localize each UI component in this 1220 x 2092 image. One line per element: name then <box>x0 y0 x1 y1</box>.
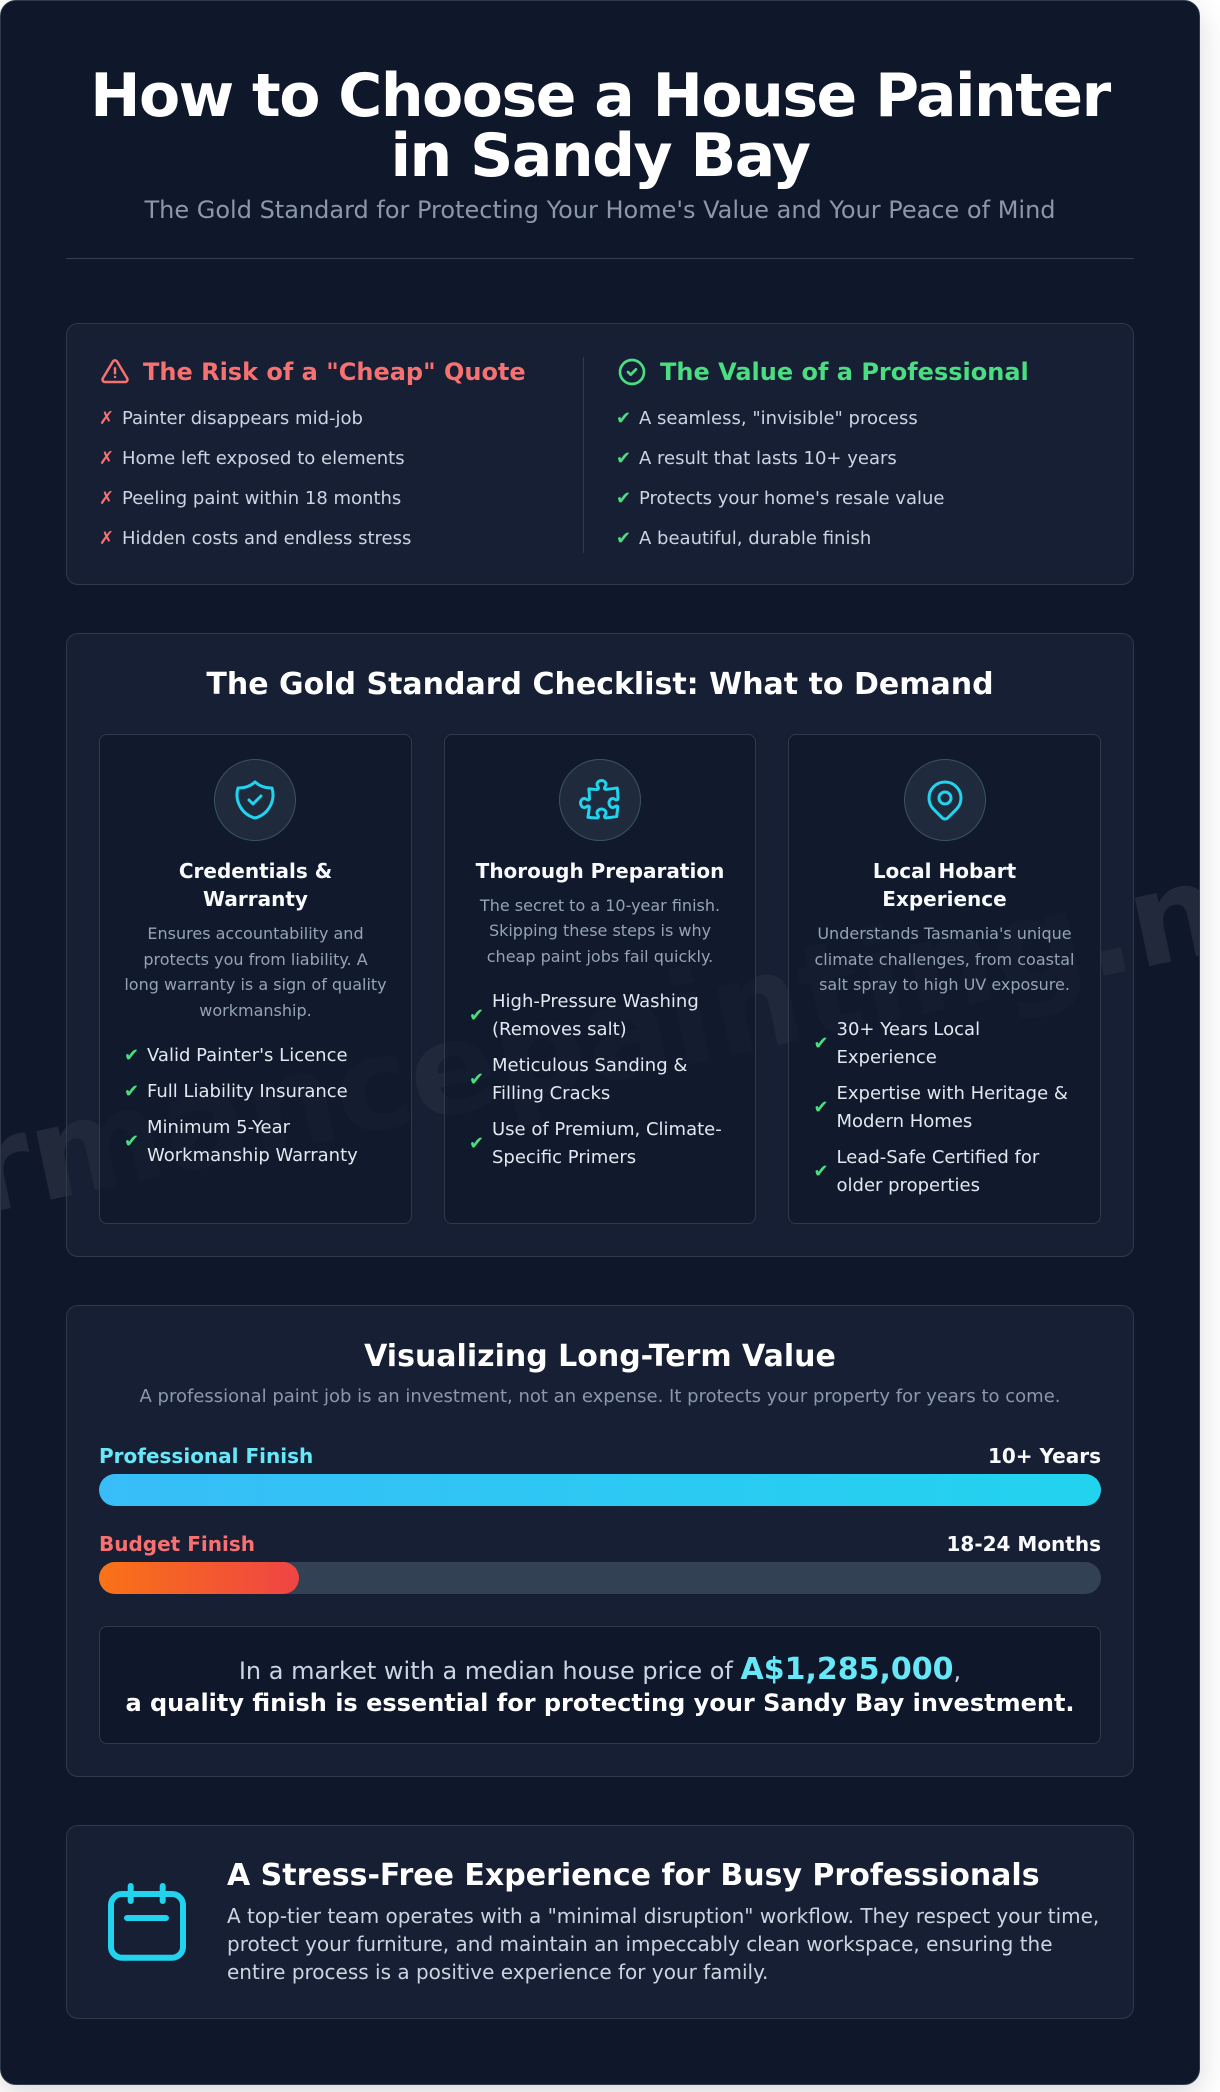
icon: circle check <box>618 358 646 386</box>
risk column <box>99 358 526 549</box>
checklist item <box>124 1081 348 1102</box>
checklist item <box>814 1019 980 1068</box>
panel: risk vs value comparison <box>66 323 1134 585</box>
risk item 1 <box>99 408 363 429</box>
checklist item <box>124 1117 358 1166</box>
panel: stress-free experience <box>66 1825 1134 2019</box>
panel: gold standard checklist <box>66 633 1134 1257</box>
paragraph: A top-tier team operates with a "minimal disruption" workflow. They respect your time, <box>227 1904 1099 1928</box>
risk column: Painter disappears mid-job <box>122 408 363 429</box>
value column: Protects your home's resale value <box>639 488 944 509</box>
card title: Warranty <box>203 887 308 911</box>
checklist item <box>469 991 699 1040</box>
risk item 4: ✗ <box>99 528 114 549</box>
checklist item <box>469 1119 722 1168</box>
bar fill: budget <box>99 1562 299 1594</box>
value item 1 <box>616 408 918 429</box>
icon: calendar <box>108 1883 186 1961</box>
risk item 4 <box>99 528 411 549</box>
checklist item: ✔ <box>124 1131 139 1152</box>
risk column: Hidden costs and endless stress <box>122 528 411 549</box>
risk column: Home left exposed to elements <box>122 448 405 469</box>
header <box>66 61 1134 259</box>
callout line 2: a quality finish is essential for protecting your Sandy Bay investment. <box>125 1689 1075 1717</box>
heading: value: The Value of a Professional <box>660 358 1029 386</box>
risk column: Peeling paint within 18 months <box>122 488 401 509</box>
checklist item <box>814 1083 1068 1132</box>
checklist item: Meticulous Sanding & <box>492 1055 687 1076</box>
paragraph <box>227 1904 1099 1984</box>
card description: Skipping these steps is why <box>489 921 711 940</box>
card: local hobart experience <box>788 734 1101 1224</box>
heading: long-term value: Visualizing Long-Term Value <box>364 1339 836 1374</box>
bar: budget finish <box>99 1562 1101 1594</box>
card description: workmanship. <box>199 1001 312 1020</box>
label: budget finish: Budget Finish <box>99 1532 255 1556</box>
card description: long warranty is a sign of quality <box>124 975 387 994</box>
checklist item: ✔ <box>469 1069 484 1090</box>
checklist item: ✔ <box>124 1081 139 1102</box>
card title: Local Hobart <box>873 859 1016 883</box>
infographic container: Valid Painter's Licence <box>147 1045 348 1066</box>
checklist item: 30+ Years Local <box>836 1019 980 1040</box>
risk item 1: ✗ <box>99 408 114 429</box>
value item 3 <box>616 488 944 509</box>
icon: map pin <box>904 759 986 841</box>
paragraph: protect your furniture, and maintain an impeccably clean workspace, ensuring the <box>227 1932 1053 1956</box>
risk item 2 <box>99 448 405 469</box>
card title <box>179 859 332 911</box>
title <box>90 61 1112 191</box>
checklist item: ✔ <box>124 1045 139 1066</box>
checklist item: ✔ <box>469 1133 484 1154</box>
label: professional finish: Professional Finish <box>99 1444 313 1468</box>
card description <box>124 924 387 1020</box>
risk item 3: ✗ <box>99 488 114 509</box>
value item 2: ✔ <box>616 448 631 469</box>
card title: Experience <box>882 887 1007 911</box>
checklist item <box>469 1055 687 1104</box>
value column: A seamless, "invisible" process <box>639 408 918 429</box>
checklist item: older properties <box>836 1175 980 1196</box>
heading: checklist: The Gold Standard Checklist: What to Demand <box>206 667 994 702</box>
risk item 2: ✗ <box>99 448 114 469</box>
checklist item: ✔ <box>469 1005 484 1026</box>
card: thorough preparation <box>444 734 756 1224</box>
title: in Sandy Bay <box>390 121 810 191</box>
title: How to Choose a House Painter <box>90 61 1110 131</box>
checklist item: ✔ <box>814 1033 829 1054</box>
checklist item <box>124 1045 348 1066</box>
checklist item: Specific Primers <box>492 1147 636 1168</box>
card description: The secret to a 10-year finish. <box>480 896 720 914</box>
checklist item: ✔ <box>814 1161 829 1182</box>
card description <box>480 896 720 966</box>
value item 1: ✔ <box>616 408 631 429</box>
description: A professional paint job is an investment, not an expense. It protects your property for years to come. <box>140 1386 1060 1407</box>
checklist item: Lead-Safe Certified for <box>836 1147 1039 1168</box>
heading: risk: The Risk of a "Cheap" Quote <box>143 358 526 386</box>
checklist item: Use of Premium, Climate- <box>492 1119 722 1140</box>
checklist item: High-Pressure Washing <box>492 991 699 1012</box>
card description: climate challenges, from coastal <box>814 950 1074 969</box>
subtitle: The Gold Standard for Protecting Your Home's Value and Your Peace of Mind <box>144 196 1056 224</box>
card title: Thorough Preparation <box>476 859 724 883</box>
icon: shield check <box>214 759 296 841</box>
card description: Understands Tasmania's unique <box>817 924 1072 943</box>
card title <box>873 859 1016 911</box>
value item 4: ✔ <box>616 528 631 549</box>
checklist item <box>814 1147 1040 1196</box>
card description: salt spray to high UV exposure. <box>819 975 1070 994</box>
value item 2 <box>616 448 897 469</box>
panel: long-term value <box>66 1305 1134 1777</box>
infographic container: Full Liability Insurance <box>147 1081 348 1102</box>
checklist item: Workmanship Warranty <box>147 1145 358 1166</box>
card description <box>814 924 1074 994</box>
card: credentials and warranty <box>99 734 412 1224</box>
checklist item: ✔ <box>814 1097 829 1118</box>
heading: stress-free: A Stress-Free Experience for Busy Professionals <box>227 1858 1040 1893</box>
checklist item: Filling Cracks <box>492 1083 610 1104</box>
value column <box>616 358 1029 549</box>
bar: professional finish <box>99 1474 1101 1506</box>
value: 18-24 months: 18-24 Months <box>946 1532 1101 1556</box>
checklist item: Modern Homes <box>836 1111 972 1132</box>
callout line 1: In a market with a median house price of A$1,285,000, <box>239 1652 961 1687</box>
value column: A beautiful, durable finish <box>639 528 871 549</box>
checklist item: Experience <box>836 1047 937 1068</box>
value column: A result that lasts 10+ years <box>639 448 897 469</box>
checklist item: (Removes salt) <box>492 1019 627 1040</box>
risk item 3 <box>99 488 401 509</box>
card title: Credentials & <box>179 859 332 883</box>
icon: warning triangle <box>101 359 129 384</box>
value item 4 <box>616 528 871 549</box>
icon: puzzle piece <box>559 759 641 841</box>
card description: cheap paint jobs fail quickly. <box>487 947 713 966</box>
checklist item: Expertise with Heritage & <box>836 1083 1068 1104</box>
card description: Ensures accountability and <box>147 924 364 943</box>
value: 10+ years: 10+ Years <box>988 1444 1101 1468</box>
card description: protects you from liability. A <box>143 950 368 969</box>
paragraph: entire process is a positive experience for your family. <box>227 1960 768 1984</box>
value item 3: ✔ <box>616 488 631 509</box>
callout: median house price <box>99 1626 1101 1744</box>
checklist item: Minimum 5-Year <box>147 1117 290 1138</box>
